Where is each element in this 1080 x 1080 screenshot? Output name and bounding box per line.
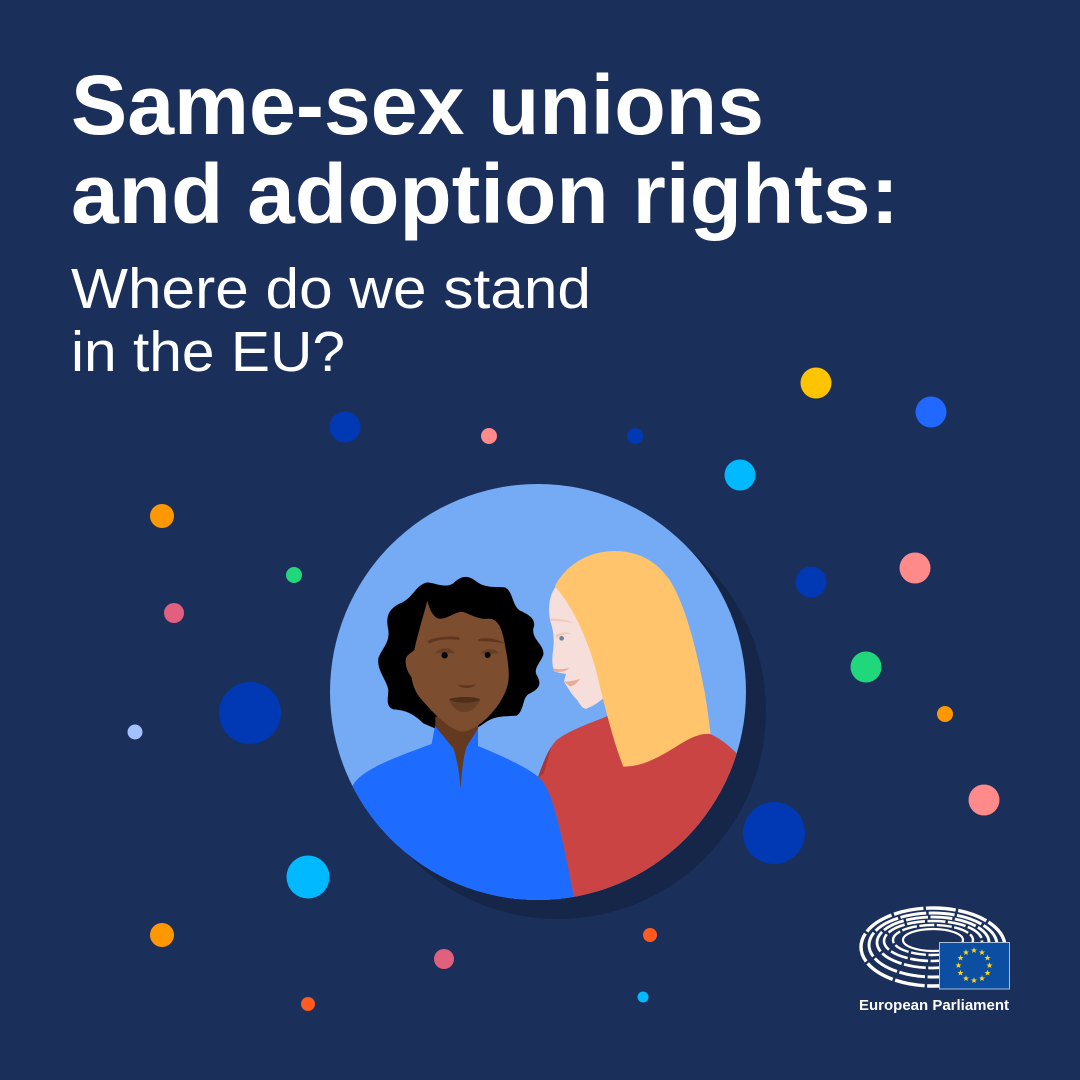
circle shadow xyxy=(350,503,766,919)
title: and adoption rights: xyxy=(71,147,899,241)
logo: hemicycle xyxy=(861,908,1005,986)
subtitle: Where do we stand xyxy=(71,257,591,321)
woman left: neck xyxy=(435,717,478,790)
woman left: mouth xyxy=(449,700,480,712)
woman right: face xyxy=(549,587,605,709)
subtitle: in the EU? xyxy=(71,320,345,384)
logo: EU flag xyxy=(940,942,1010,989)
woman left: hair xyxy=(378,577,543,728)
woman left: blouse xyxy=(352,726,574,900)
decorative dots xyxy=(128,368,1000,1011)
title: Same-sex unions xyxy=(71,58,764,152)
circle background xyxy=(330,484,746,900)
illustration: two women in a circle xyxy=(330,484,766,923)
logo: European Parliament xyxy=(859,908,1010,1014)
title xyxy=(71,58,899,241)
woman right: hair xyxy=(555,551,711,767)
woman left: eyebrows xyxy=(427,637,459,644)
woman left: eyes xyxy=(435,648,455,653)
subtitle xyxy=(71,257,591,384)
woman right: eye and brow xyxy=(550,619,575,623)
woman right: sweater xyxy=(538,716,737,898)
woman left: face xyxy=(406,601,509,732)
woman left: nose xyxy=(457,684,476,688)
logo: wordmark: European Parliament xyxy=(859,998,1009,1014)
